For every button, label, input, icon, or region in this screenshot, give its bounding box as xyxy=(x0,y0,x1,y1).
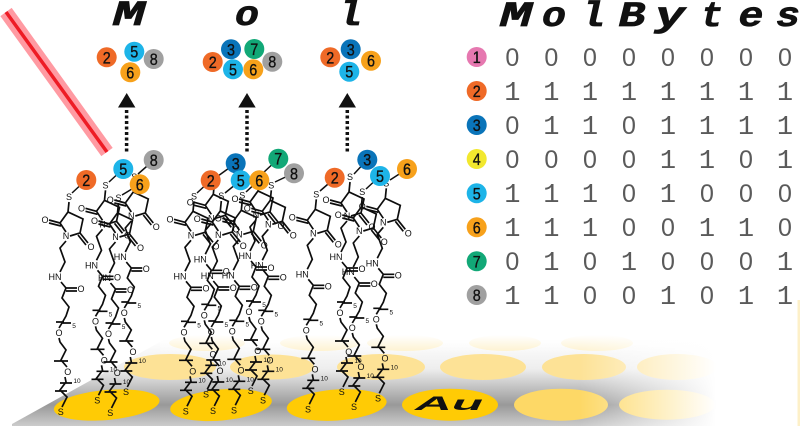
ball 8: 8 xyxy=(150,50,158,69)
row 1: 0 xyxy=(778,44,792,72)
chain with ball 8: HN xyxy=(251,260,264,270)
row 8: 1 xyxy=(777,283,793,313)
chain with ball 5: S xyxy=(218,191,224,201)
chain with ball 7: S xyxy=(248,386,254,396)
row 2: 1 xyxy=(738,79,754,109)
chain with ball 7: O xyxy=(254,346,261,356)
row 2: 1 xyxy=(660,79,676,109)
row 8 xyxy=(467,282,793,313)
ball 3: 3 xyxy=(347,40,355,59)
chain with ball 3: 10 xyxy=(354,358,362,365)
row 4: 1 xyxy=(699,147,715,177)
row 3: 1 xyxy=(660,113,676,143)
ball 3: 3 xyxy=(227,40,235,59)
ball 2: 2 xyxy=(326,48,334,67)
chain with ball 5: N xyxy=(215,230,222,240)
chain with ball 3: O xyxy=(322,195,330,205)
chain with ball 5: O xyxy=(114,272,121,282)
chain with ball 5: 5 xyxy=(109,311,113,318)
chain with ball 6: O xyxy=(381,353,389,363)
chain with ball 5: S xyxy=(102,180,109,190)
chain with ball 8: N xyxy=(265,219,272,229)
chain with ball 6: N xyxy=(380,217,387,227)
ball 8: 8 xyxy=(268,53,276,72)
row 8: 0 xyxy=(700,282,714,310)
chain with ball 2: S xyxy=(313,189,319,199)
chain with ball 5 xyxy=(78,180,131,405)
chain with ball 3: O xyxy=(336,308,344,318)
chain with ball 3: S xyxy=(211,174,217,184)
chain with ball 2: O xyxy=(64,367,71,377)
laser beam xyxy=(6,12,107,152)
chain with ball 6: 10 xyxy=(391,364,398,371)
row 1: 0 xyxy=(739,44,753,72)
row 2: 1 xyxy=(777,79,793,109)
chain with ball 6: HN xyxy=(366,258,379,268)
row 7: 0 xyxy=(661,248,675,276)
chain with ball 2: 5 xyxy=(319,320,323,327)
row 1: 0 xyxy=(544,44,558,72)
chain with ball 3: O xyxy=(187,197,194,207)
chain with ball 5: O xyxy=(216,366,224,376)
chain with ball 5: O xyxy=(230,283,237,293)
row 8: 1 xyxy=(660,283,676,313)
row 5: 1 xyxy=(504,181,520,211)
chain with ball 8: S xyxy=(268,180,274,190)
chain with ball 5: O xyxy=(349,323,356,333)
chain with ball 2: O xyxy=(335,239,342,249)
chain with ball 8: 5 xyxy=(274,311,278,318)
chain with ball 5: O xyxy=(92,316,99,326)
chain with ball 8: O xyxy=(266,355,274,365)
chain with ball 5: O xyxy=(381,237,388,247)
chain with ball 2: O xyxy=(202,283,210,293)
row 1: 0 xyxy=(622,44,636,72)
chain with ball 6: 5 xyxy=(389,309,393,316)
row 4: 1 xyxy=(660,147,676,177)
chain with ball 8: O xyxy=(280,272,287,282)
chain with ball 6: 10 xyxy=(247,376,254,383)
monolayer chains: o group xyxy=(166,171,297,416)
chain with ball 2: HN xyxy=(174,271,186,281)
ball 2: 2 xyxy=(207,171,215,190)
row 7: 0 xyxy=(739,248,753,276)
chain with ball 2: N xyxy=(310,228,317,238)
chain with ball 6: N xyxy=(236,229,243,239)
chain with ball 7: HN xyxy=(238,251,252,261)
chain with ball 5: O xyxy=(335,210,342,220)
row 2: 1 xyxy=(543,79,559,109)
row 5: 0 xyxy=(700,180,714,208)
chain with ball 2: 10 xyxy=(198,377,206,384)
row 4: 0 xyxy=(583,146,597,174)
binary table xyxy=(467,44,793,313)
surface tag balls: M xyxy=(76,150,164,194)
chain with ball 5: S xyxy=(351,402,357,412)
chain with ball 2: O xyxy=(55,328,63,338)
chain with ball 8: N xyxy=(128,211,135,221)
chain with ball 2: O xyxy=(311,364,319,374)
chain with ball 7: 5 xyxy=(262,302,266,309)
chain with ball 5: S xyxy=(94,395,100,405)
row 6: 0 xyxy=(778,214,792,242)
row 3: 0 xyxy=(505,112,519,140)
chain with ball 2: O xyxy=(166,214,174,224)
row 7 xyxy=(467,248,793,279)
row 8: 8 xyxy=(473,286,481,305)
arrow: l xyxy=(339,93,356,152)
chain with ball 3: O xyxy=(345,347,352,357)
row 4: 0 xyxy=(739,146,753,174)
chain with ball 5: 10 xyxy=(226,377,233,384)
ball 6: 6 xyxy=(126,63,134,82)
linker lines from sulfur to tag balls xyxy=(72,159,407,195)
chain with ball 6: S xyxy=(239,190,245,200)
chain with ball 8: 5 xyxy=(137,303,141,310)
ball 3: 3 xyxy=(363,151,371,170)
chain with ball 3: O xyxy=(368,222,376,232)
chain with ball 6: O xyxy=(395,270,402,280)
chain with ball 2: O xyxy=(325,281,332,291)
monolayer chains: M group xyxy=(41,172,160,418)
surface tag balls: l xyxy=(325,150,417,188)
chain with ball 8: O xyxy=(143,264,150,274)
row 6: 0 xyxy=(661,214,675,242)
chain with ball 6: S xyxy=(375,393,381,403)
chain with ball 8: O xyxy=(153,222,160,232)
chain with ball 6: O xyxy=(251,282,258,292)
chain with ball 6: O xyxy=(405,228,412,238)
chain with ball 7: O xyxy=(245,307,253,317)
row 7: 0 xyxy=(583,248,597,276)
chain with ball 7: O xyxy=(231,194,239,204)
row 2: 1 xyxy=(699,79,715,109)
chain with ball 3: S xyxy=(339,387,345,397)
word letters M o l xyxy=(111,0,362,36)
ball 5: 5 xyxy=(229,60,237,79)
chain with ball 5 xyxy=(335,187,388,412)
chain with ball 7 xyxy=(231,171,285,396)
chain with ball 3: O xyxy=(223,266,230,276)
chain with ball 8: 10 xyxy=(276,366,283,373)
chain with ball 5: HN xyxy=(85,260,98,270)
chain with ball 5: S xyxy=(210,406,216,416)
row 6: 0 xyxy=(622,214,636,242)
chain with ball 7: N xyxy=(253,210,259,220)
chain with ball 5: N xyxy=(356,226,363,236)
chain with ball 2 xyxy=(166,191,220,416)
chain with ball 6: HN xyxy=(222,270,235,280)
chain with ball 2: 5 xyxy=(72,323,76,330)
row 4: 0 xyxy=(544,146,558,174)
ball 6: 6 xyxy=(255,171,263,190)
row 1 xyxy=(467,44,792,72)
ball 5: 5 xyxy=(376,167,384,186)
chain with ball 2 xyxy=(41,192,95,417)
row 6: 1 xyxy=(504,215,520,245)
row 5: 1 xyxy=(660,181,676,211)
row 1: 0 xyxy=(661,44,675,72)
chain with ball 5: O xyxy=(194,214,201,224)
ball 8: 8 xyxy=(290,164,298,183)
row 4 xyxy=(467,146,793,177)
ball 6: 6 xyxy=(136,175,144,194)
chain with ball 8: S xyxy=(260,395,266,405)
row 3: 3 xyxy=(473,116,481,135)
chain with ball 6: S xyxy=(107,408,113,418)
ball 2: 2 xyxy=(103,48,111,67)
chain with ball 6: N xyxy=(112,232,119,242)
chain with ball 6: S xyxy=(115,193,122,203)
ball 5: 5 xyxy=(237,171,245,190)
chain with ball 5: 10 xyxy=(367,373,374,380)
MolBytes heading xyxy=(498,0,800,37)
chain with ball 7: O xyxy=(277,221,285,231)
chain with ball 6: O xyxy=(215,213,222,223)
chain with ball 5: N xyxy=(99,219,106,229)
gold surface with electrode spots xyxy=(12,300,800,426)
chain with ball 8: S xyxy=(131,172,137,182)
chain with ball 3: 5 xyxy=(353,303,357,310)
chain with ball 2: O xyxy=(289,212,296,222)
ball 2: 2 xyxy=(82,171,90,190)
chain with ball 5: O xyxy=(78,203,85,213)
chain with ball 3: O xyxy=(233,224,240,234)
ball 6: 6 xyxy=(403,160,411,179)
ball 5: 5 xyxy=(345,63,353,82)
chain with ball 2: O xyxy=(180,327,188,337)
chain with ball 3: S xyxy=(347,172,353,182)
chain with ball 3: N xyxy=(344,211,350,221)
row 8: 1 xyxy=(543,283,559,313)
row 6: 1 xyxy=(543,215,559,245)
chain with ball 2: S xyxy=(191,191,197,201)
mass spec pattern: o xyxy=(203,39,282,79)
chain with ball 2: S xyxy=(66,192,72,202)
row 7: 0 xyxy=(700,248,714,276)
chain with ball 8: O xyxy=(258,316,265,326)
Au label: Au xyxy=(412,394,484,415)
chain with ball 6: O xyxy=(137,243,144,253)
arrow: M xyxy=(118,93,135,152)
row 4: 0 xyxy=(505,146,519,174)
chain with ball 6: O xyxy=(114,368,121,378)
row 8: 0 xyxy=(583,282,597,310)
chain with ball 8: O xyxy=(107,195,114,205)
chain with ball 5: HN xyxy=(342,267,355,277)
row 5: 5 xyxy=(473,184,481,203)
row 6: 1 xyxy=(582,215,598,245)
chain with ball 2: O xyxy=(77,284,85,294)
chain with ball 5: 5 xyxy=(224,322,228,329)
chain with ball 2: HN xyxy=(296,269,309,279)
chain with ball 5: HN xyxy=(201,271,214,281)
chain with ball 6: HN xyxy=(98,273,111,283)
ball 6: 6 xyxy=(367,52,375,71)
row 5: 0 xyxy=(778,180,792,208)
front row of gold spots xyxy=(53,385,715,425)
chain with ball 3: 5 xyxy=(217,305,221,312)
chain with ball 6: S xyxy=(383,178,389,188)
row 1: 1 xyxy=(473,48,481,67)
chain with ball 2 xyxy=(289,189,342,414)
arrow: o xyxy=(238,93,256,152)
chain with ball 7: O xyxy=(267,263,275,273)
chain with ball 5: O xyxy=(240,241,247,251)
mass spec pattern: l xyxy=(320,39,381,82)
row 7: 0 xyxy=(505,248,519,276)
chain with ball 8: O xyxy=(129,347,137,357)
row 3 xyxy=(467,112,793,143)
row 6: 6 xyxy=(473,218,481,237)
row 6: 1 xyxy=(738,215,754,245)
row 3: 1 xyxy=(699,113,715,143)
chain with ball 2: S xyxy=(58,407,64,417)
chain with ball 2: O xyxy=(303,325,310,335)
chain with ball 8: S xyxy=(123,387,129,397)
chain with ball 8: O xyxy=(290,230,297,240)
chain with ball 3: HN xyxy=(330,252,342,262)
ball 2: 2 xyxy=(209,53,217,72)
row 6 xyxy=(467,214,792,245)
row 3: 1 xyxy=(738,113,754,143)
row 5 xyxy=(467,180,792,211)
chain with ball 3 xyxy=(187,174,240,399)
chain with ball 6: 10 xyxy=(123,379,130,386)
middle row of gold spots xyxy=(124,354,717,380)
back row of gold spots xyxy=(169,335,633,351)
chain with ball 5: O xyxy=(371,279,378,289)
chain with ball 2: 10 xyxy=(321,375,328,382)
chain with ball 7: 10 xyxy=(263,357,271,364)
row 7: 1 xyxy=(777,249,793,279)
chain with ball 5: O xyxy=(208,327,215,337)
chain with ball 8: O xyxy=(244,203,251,213)
chain with ball 6: O xyxy=(127,285,134,295)
chain with ball 3 xyxy=(322,172,376,397)
chain with ball 6: O xyxy=(91,216,98,226)
row 2: 1 xyxy=(504,79,520,109)
ball 6: 6 xyxy=(249,60,257,79)
ball 2: 2 xyxy=(331,169,339,188)
row 2: 2 xyxy=(473,82,481,101)
ball 8: 8 xyxy=(150,151,158,170)
chain with ball 3: O xyxy=(358,264,366,274)
chain with ball 6 xyxy=(359,178,412,403)
chain with ball 2: S xyxy=(183,406,189,416)
row 8: 0 xyxy=(622,282,636,310)
row 4: 1 xyxy=(777,147,793,177)
chain with ball 6: O xyxy=(229,326,236,336)
chain with ball 6 xyxy=(91,193,144,418)
chain with ball 2: O xyxy=(41,215,49,225)
chain with ball 2: 10 xyxy=(73,378,81,385)
chain with ball 5: 10 xyxy=(110,366,117,373)
ball 5: 5 xyxy=(130,43,138,62)
row 2: 1 xyxy=(621,79,637,109)
chain with ball 3: S xyxy=(203,389,209,399)
chain with ball 6: O xyxy=(105,329,112,339)
mass spec pattern: M xyxy=(97,42,164,82)
row 2: 1 xyxy=(582,79,598,109)
chain with ball 2: HN xyxy=(48,272,62,282)
row 3: 1 xyxy=(777,113,793,143)
chain with ball 6: O xyxy=(359,201,366,211)
row 5: 0 xyxy=(622,180,636,208)
row 1: 0 xyxy=(700,44,714,72)
chain with ball 8 xyxy=(107,172,160,397)
row 3: 1 xyxy=(582,113,598,143)
chain with ball 2: 5 xyxy=(197,322,201,329)
chain with ball 5: S xyxy=(359,187,365,197)
row 1: 0 xyxy=(505,44,519,72)
chain with ball 2: N xyxy=(63,231,69,241)
chain with ball 7: S xyxy=(256,171,262,181)
row 7: 1 xyxy=(543,249,559,279)
chain with ball 8: HN xyxy=(114,252,127,262)
row 8: 1 xyxy=(738,283,754,313)
chain with ball 6 xyxy=(215,190,268,415)
row 3: 0 xyxy=(622,112,636,140)
ball 3: 3 xyxy=(232,154,240,173)
surface tag balls: o xyxy=(201,149,304,190)
row 4: 0 xyxy=(622,146,636,174)
row 3: 1 xyxy=(543,113,559,143)
chain with ball 6: 5 xyxy=(122,324,126,331)
chain with ball 5 xyxy=(194,191,247,416)
chain with ball 3: N xyxy=(208,213,215,223)
row 5: 0 xyxy=(739,180,753,208)
chain with ball 8: 10 xyxy=(139,358,146,365)
chain with ball 6: 5 xyxy=(245,321,249,328)
chain with ball 3: HN xyxy=(194,254,207,264)
chain with ball 2: S xyxy=(305,404,311,414)
chain with ball 8 xyxy=(244,180,297,405)
chain with ball 3: 10 xyxy=(219,360,226,367)
chain with ball 2: N xyxy=(188,230,194,240)
ball 7: 7 xyxy=(250,40,258,59)
chain with ball 5: O xyxy=(124,230,131,240)
chain with ball 3: O xyxy=(209,349,217,359)
row 1: 0 xyxy=(583,44,597,72)
chain with ball 6: O xyxy=(261,240,268,250)
chain with ball 5: 5 xyxy=(365,318,369,325)
row 7: 7 xyxy=(473,252,481,271)
chain with ball 2: O xyxy=(189,366,196,376)
chain with ball 6: O xyxy=(373,314,380,324)
row 5: 1 xyxy=(543,181,559,211)
row 7: 1 xyxy=(621,249,637,279)
row 5: 1 xyxy=(582,181,598,211)
row 6: 1 xyxy=(699,215,715,245)
row 4: 4 xyxy=(473,150,481,169)
monolayer chains: l group xyxy=(289,172,412,414)
row 2 xyxy=(467,79,793,109)
row 8: 1 xyxy=(504,283,520,313)
chain with ball 6: S xyxy=(231,405,237,415)
chain with ball 5: O xyxy=(101,355,108,365)
chain with ball 6: O xyxy=(237,365,245,375)
chain with ball 2: O xyxy=(87,242,95,252)
chain with ball 3: O xyxy=(201,310,208,320)
ball 7: 7 xyxy=(274,150,282,169)
chain with ball 2: O xyxy=(212,241,220,251)
ball 5: 5 xyxy=(119,160,127,179)
chain with ball 8: O xyxy=(121,308,128,318)
chain with ball 5: O xyxy=(357,362,365,372)
